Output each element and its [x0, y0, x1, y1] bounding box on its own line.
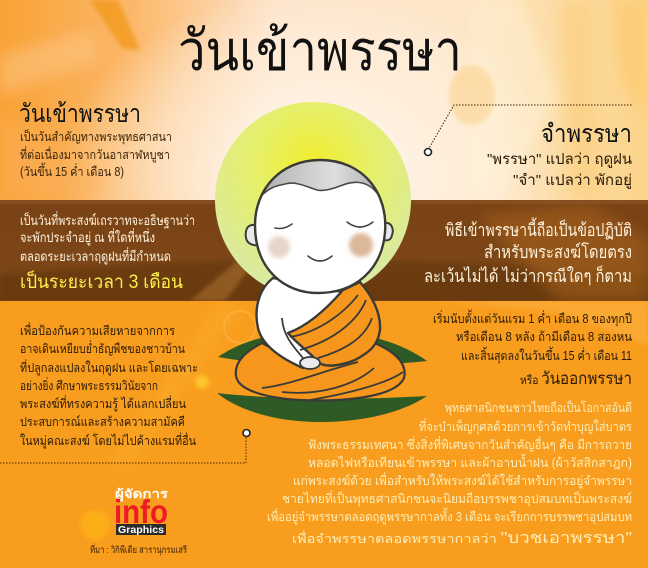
text block: protecting crops and study: ที่ปลูกลงแปลงในฤดูฝน และโดยเฉพาะ [20, 359, 198, 376]
text block: start and end dates: หรือเดือน 8 หลัง ถ้ามีเดือน 8 สองหน [456, 330, 632, 344]
source credit: ที่มา : วิกิพีเดีย สารานุกรมเสรี [90, 543, 187, 556]
cheeks [268, 233, 373, 258]
green mat [217, 330, 427, 422]
callout connector: Cham Phansa [424, 105, 633, 156]
text block: customs: ฟังพระธรรมเทศนา ซึ่งสิ่งที่พิเศษจากวันสำคัญอื่นๆ คือ มีการถวาย [308, 436, 632, 452]
meaning lines [487, 151, 632, 189]
text block: protecting crops and study: พระสงฆ์ที่ทรงความรู้ ได้แลกเปลี่ยน [20, 395, 186, 412]
description lines: เป็นวันสำคัญทางพระพุทธศาสนา [20, 129, 172, 145]
logo publisher name: ผู้จัดการ [115, 487, 169, 502]
background: upper light rays panel [0, 0, 648, 200]
title: วันเข้าพรรษา [178, 19, 462, 82]
description lines: ที่ต่อเนื่องมาจากวันอาสาฬหบูชา [20, 146, 170, 163]
text block: what is Khao Phansa [19, 100, 172, 179]
callout connector: lower left [0, 430, 250, 463]
text block: customs [267, 400, 632, 547]
text block: brown band left [20, 211, 195, 293]
text block: brown band left: จะพักประจำอยู่ ณ ที่ใดที่หนึ่ง [20, 228, 155, 246]
text block: customs: เพื่อจำพรรษาตลอดพรรษากาลว่า "บวชเอาพรรษา" [292, 530, 632, 547]
monk illustration [217, 150, 427, 422]
heading: Khao Phansa: วันเข้าพรรษา [19, 100, 141, 128]
background: brown band [0, 200, 648, 301]
logo word info: info [114, 493, 168, 530]
text block: brown band left: เป็นวันที่พระสงฆ์เถรวาทจะอธิษฐานว่า [20, 211, 195, 229]
text block: protecting crops and study: ในหมู่คณะสงฆ์ โดยไม่ไปค้างแรมที่อื่น [20, 432, 196, 449]
text block: customs: ชายไทยที่เป็นพุทธศาสนิกชนจะนิยมถือบรรพชาอุปสมบทเป็นพระสงฆ์ [282, 490, 632, 507]
background: lower orange panel [80, 301, 648, 540]
text block: Cham Phansa meaning [487, 120, 632, 189]
description lines: (วันขึ้น 15 ค่ำ เดือน 8) [20, 162, 124, 179]
meaning lines: "จำ" แปลว่า พักอยู่ [513, 172, 632, 189]
text block: customs: แก่พระสงฆ์ด้วย เพื่อสำหรับให้พระสงฆ์ได้ใช้สำหรับการอยู่จำพรรษา [293, 472, 632, 489]
logo: info graphics [114, 487, 169, 536]
text block: protecting crops and study: อาจเดินเหยียบย่ำธัญพืชของชาวบ้าน [20, 340, 185, 356]
text block: start and end dates [433, 309, 632, 388]
end of lent label: หรือ วันออกพรรษา [520, 369, 632, 388]
ears [246, 223, 393, 245]
hand [300, 357, 320, 369]
text block: protecting crops and study: ประสบการณ์และสร้างความสามัคคี [20, 415, 185, 429]
text block: protecting crops and study: อย่างยิ่ง ศึกษาพระธรรมวินัยจาก [20, 377, 158, 393]
text block: protecting crops and study [20, 322, 198, 449]
text block: brown band left: ตลอดระยะเวลาฤดูฝนที่มีกำหนด [20, 247, 171, 265]
body [257, 278, 345, 368]
highlight: three months: เป็นระยะเวลา 3 เดือน [20, 269, 183, 293]
meaning lines: "พรรษา" แปลว่า ฤดูฝน [487, 151, 632, 168]
text block: customs: หลอดไฟหรือเทียนเข้าพรรษา และผ้าอาบน้ำฝน (ผ้าวัสสิกสาฎก) [308, 453, 632, 470]
orange robe [288, 282, 380, 366]
description lines [20, 129, 172, 179]
text block: brown band right [424, 217, 632, 286]
hair [265, 161, 374, 192]
halo behind monk [215, 102, 411, 298]
text block: protecting crops and study: เพื่อป้องกันความเสียหายจากการ [20, 322, 175, 338]
logo word graphics: Graphics [118, 525, 164, 536]
heading: Cham Phansa: จำพรรษา [541, 120, 632, 148]
crossed legs [236, 342, 405, 400]
head [250, 150, 390, 293]
eyes and mouth [275, 222, 373, 261]
